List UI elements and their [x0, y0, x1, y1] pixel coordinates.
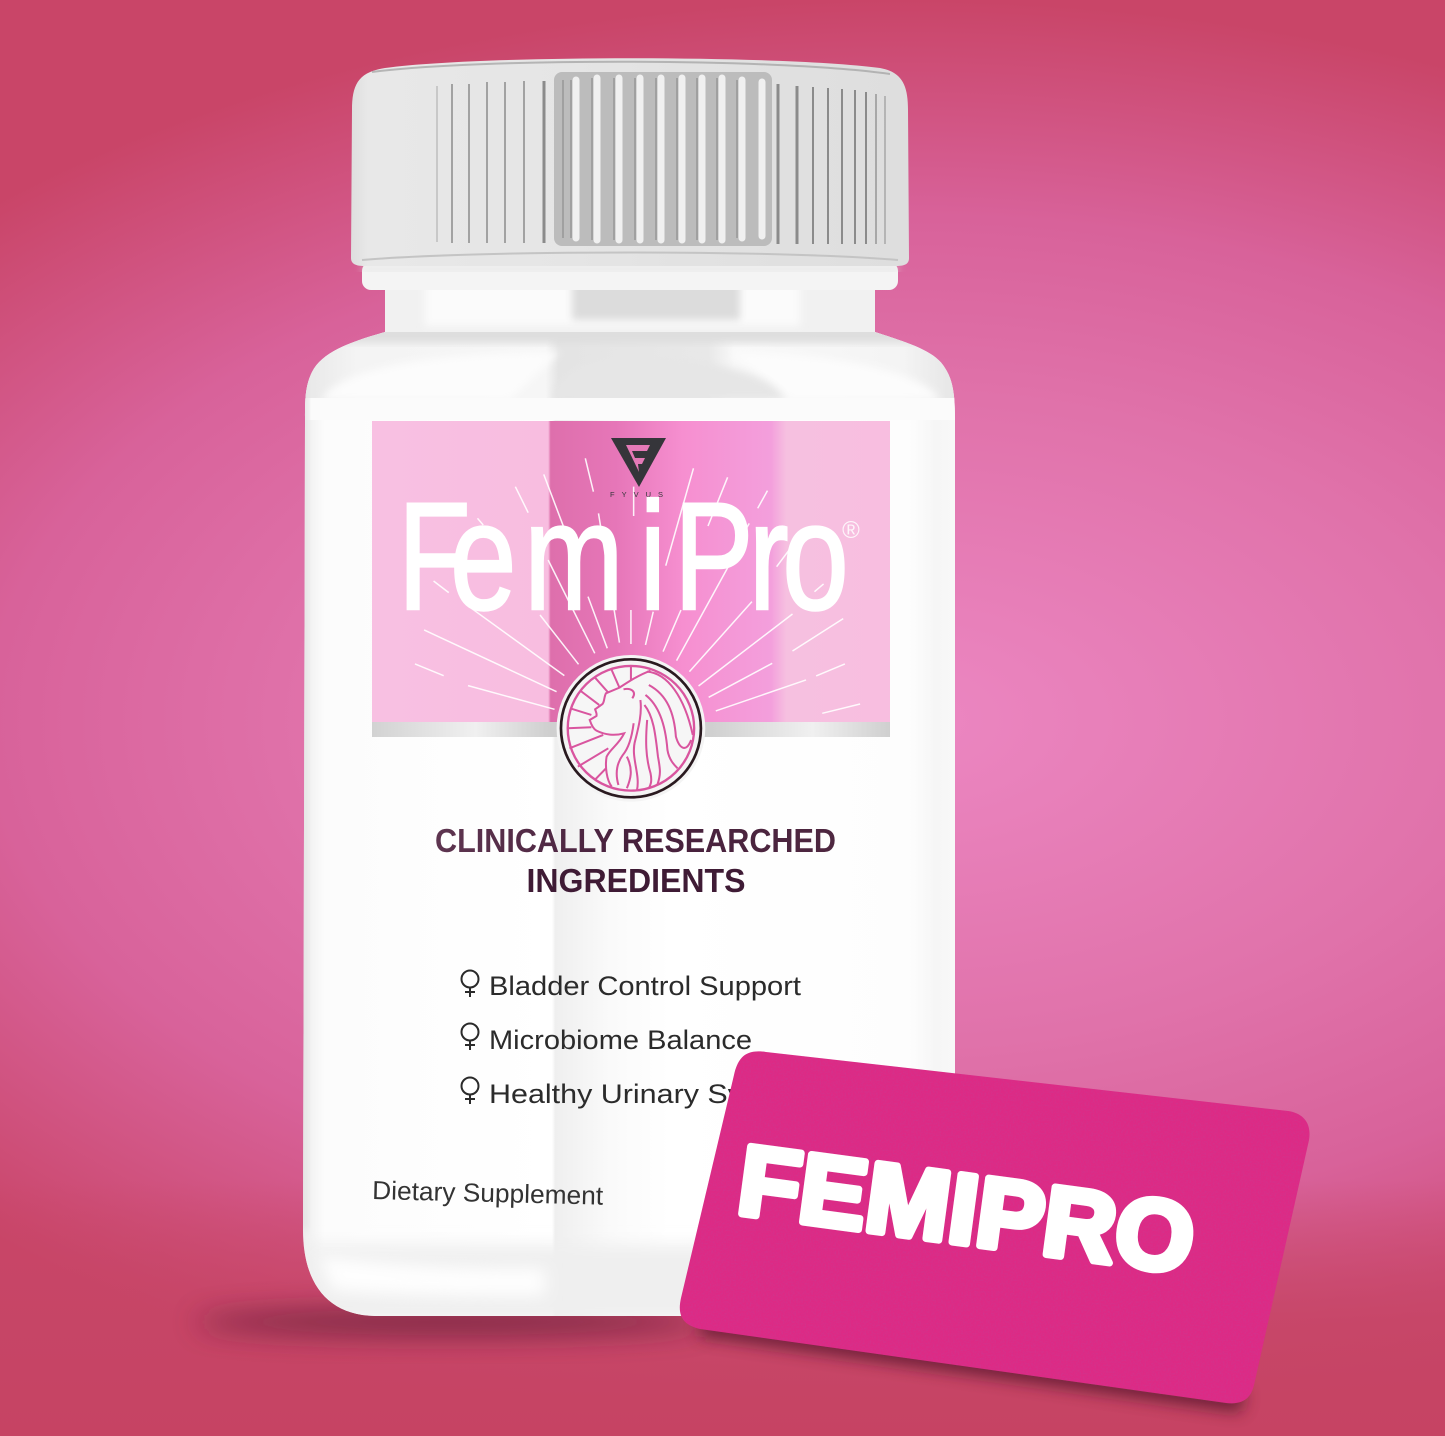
benefit: urinary system: Healthy Urinary System: [489, 1079, 809, 1109]
ribbed grip centre: [554, 72, 772, 246]
medallion rays: [568, 666, 631, 780]
bottle cap: [351, 58, 909, 266]
logo mark: [611, 438, 666, 487]
card shadow: [700, 1318, 1246, 1412]
headline: [435, 822, 836, 899]
benefit: microbiome: Microbiome Balance: [489, 1025, 752, 1055]
registered mark: ®: [842, 517, 860, 544]
product name: FemiPro: [398, 472, 849, 642]
bottle: [296, 262, 960, 1325]
dietary supplement: Dietary Supplement: [372, 1175, 604, 1211]
ribbed grip right: [778, 84, 885, 244]
benefits list: [462, 970, 809, 1109]
medallion: [557, 655, 705, 802]
card: [680, 1051, 1310, 1403]
medallion hair: [617, 672, 693, 790]
logo wordmark: FYVUS: [610, 490, 670, 499]
bottle neck: [362, 262, 898, 342]
sunburst rays: [415, 458, 860, 713]
bottle body: [296, 325, 960, 1325]
headline: INGREDIENTS: [526, 862, 746, 899]
card wordmark: FEMIPRO: [732, 1124, 1201, 1294]
benefit: bladder control: Bladder Control Support: [489, 971, 802, 1001]
label: pink band: [372, 421, 890, 737]
brand logo: FYVUS: [610, 438, 670, 499]
medallion face: [590, 671, 651, 787]
label silver strip: [372, 722, 890, 737]
headline: CLINICALLY RESEARCHED: [435, 822, 836, 859]
ribbed grip left: [437, 81, 544, 243]
bottle shadow: [195, 1308, 705, 1336]
